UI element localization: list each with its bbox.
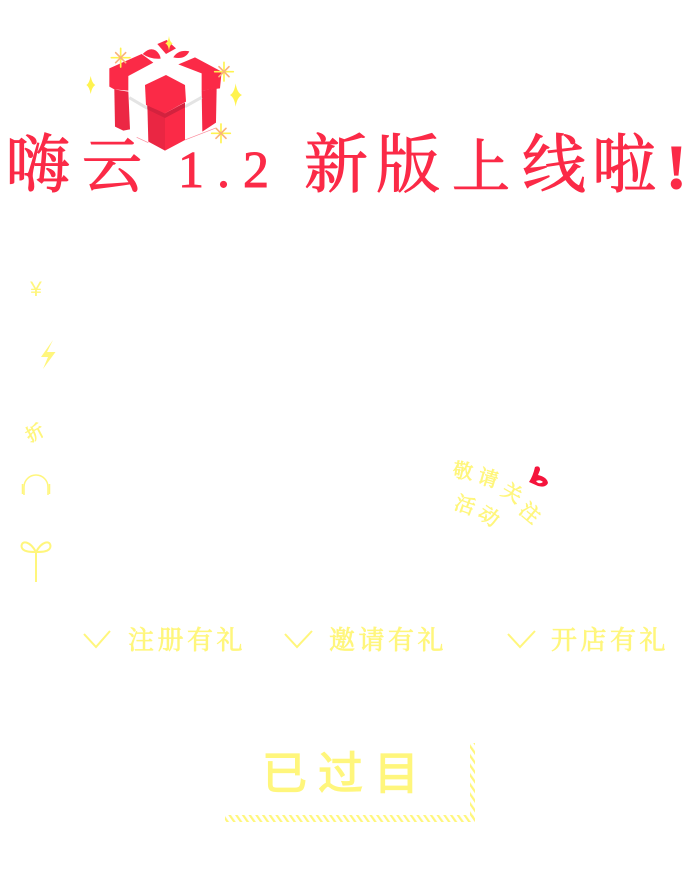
gift lid right <box>178 57 222 91</box>
gift center top <box>145 75 186 113</box>
title: 上 <box>452 135 510 200</box>
title: 版 <box>376 130 440 201</box>
title: 云 <box>82 134 142 200</box>
gift center front right <box>165 103 185 151</box>
icon: lightning <box>41 340 56 369</box>
sparkle burst 2 <box>215 62 233 81</box>
title <box>6 130 684 202</box>
gift bow <box>143 40 189 59</box>
label: 邀请有礼 <box>329 626 447 655</box>
sparkles <box>86 36 242 107</box>
ribbon shadow <box>129 97 202 108</box>
title: 线 <box>522 130 586 201</box>
icon: gift box <box>86 36 242 151</box>
gift lid left <box>109 54 153 91</box>
sparkle burst 1 <box>111 48 130 67</box>
stamp text: 已过目 <box>262 748 430 799</box>
curved invite text: 请 <box>475 465 501 492</box>
check icon <box>84 631 110 647</box>
curved invite text: 关 <box>497 478 526 508</box>
title: 新 <box>304 130 368 201</box>
icon: ribbon sprout <box>22 542 50 582</box>
title: 嗨 <box>6 130 70 201</box>
sparkle burst 3 <box>212 124 230 143</box>
checklist: invite gift <box>285 626 447 655</box>
checklist: open store gift <box>508 626 669 655</box>
curved invite text: 敬 <box>451 459 474 484</box>
icon: discount character: 折 <box>22 420 48 446</box>
gift side right <box>202 88 217 132</box>
curved invite text: 注 <box>515 498 545 529</box>
curved invite text: 活 <box>451 491 478 520</box>
title: 啦 <box>592 130 656 201</box>
gift center front left <box>147 104 165 151</box>
icon: red ribbon mark <box>529 466 548 487</box>
gift ground lines <box>137 128 215 143</box>
hatched bottom border <box>225 815 474 822</box>
title: 1.2 <box>178 142 282 199</box>
label: 开店有礼 <box>551 626 669 655</box>
icon: headphones <box>22 475 50 495</box>
curved invite text: 动 <box>474 501 504 532</box>
reviewed stamp <box>225 743 475 822</box>
check icon <box>508 631 535 647</box>
icon: yen: ¥ <box>29 278 42 301</box>
checklist: register gift <box>84 626 246 655</box>
hatched right border <box>470 743 475 822</box>
gift center shadow band <box>147 103 185 118</box>
curved invite text <box>451 459 545 532</box>
check icon <box>285 631 312 647</box>
gift side left <box>114 89 130 131</box>
label: 注册有礼 <box>128 626 246 655</box>
